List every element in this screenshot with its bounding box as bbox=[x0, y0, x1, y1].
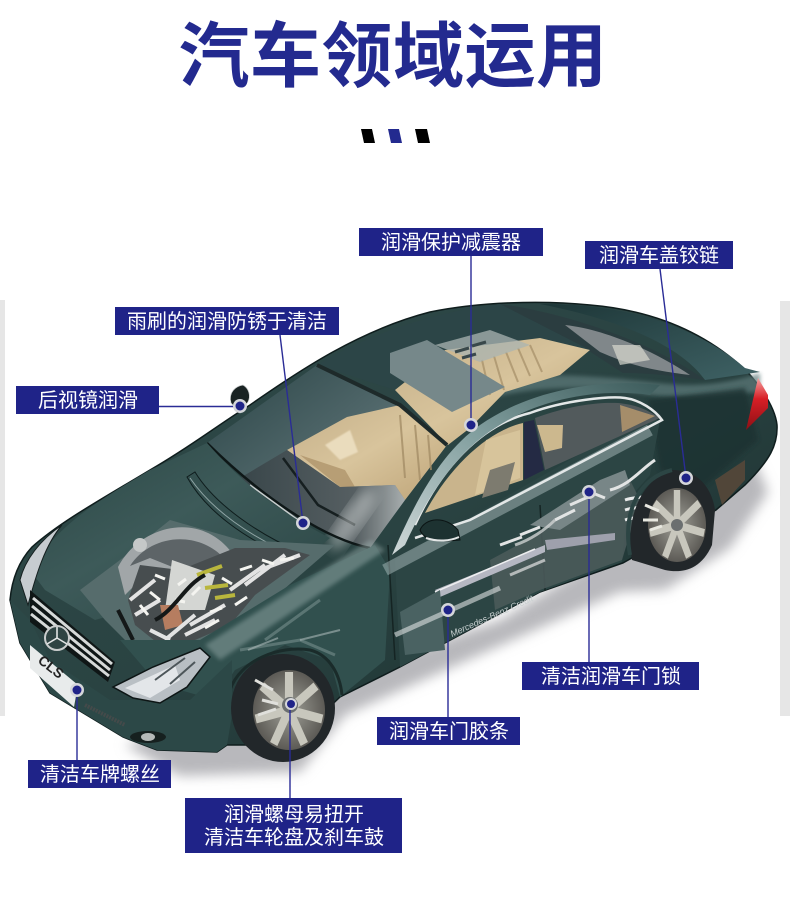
callout: door lock bbox=[522, 485, 699, 690]
callout: door seal bbox=[377, 603, 520, 745]
callout: license plate screws bbox=[28, 683, 171, 788]
door interior mechanics bbox=[395, 460, 657, 655]
rear window bbox=[500, 304, 705, 380]
callout: trunk hinge bbox=[585, 241, 733, 485]
license plate bbox=[30, 645, 78, 707]
callout: wiper: 雨刷的润滑防锈于清洁 bbox=[127, 310, 327, 333]
roof glass panel bbox=[390, 330, 530, 412]
windshield bbox=[207, 365, 447, 556]
callout: rear-view mirror: 后视镜润滑 bbox=[38, 389, 138, 412]
rear quarter panel highlight bbox=[490, 373, 760, 490]
wing mirror on left side bbox=[230, 385, 249, 413]
callout: shock absorber: 润滑保护减震器 bbox=[381, 231, 521, 254]
license plate: CLS bbox=[35, 652, 67, 682]
callout: door lock: 清洁润滑车门锁 bbox=[541, 665, 681, 688]
tail light bbox=[746, 378, 768, 430]
front left headlight bbox=[20, 525, 62, 605]
callout: wheel nuts and brake drum: 清洁车轮盘及刹车鼓 bbox=[204, 826, 384, 849]
callout: rear-view mirror bbox=[16, 386, 247, 414]
front door and sill bbox=[385, 420, 660, 667]
callout: trunk hinge: 润滑车盖铰链 bbox=[599, 244, 719, 267]
front wheel bbox=[231, 654, 335, 762]
front bumper bbox=[10, 600, 232, 752]
callout: license plate screws: 清洁车牌螺丝 bbox=[40, 763, 160, 786]
ground shadow bbox=[125, 462, 768, 776]
car body bbox=[10, 302, 777, 752]
callout: wheel nuts and brake drum bbox=[185, 698, 402, 853]
cowl vent grille bbox=[187, 472, 300, 560]
title decoration marks bbox=[361, 129, 430, 143]
engine bay bbox=[80, 520, 335, 645]
trunk lid bbox=[540, 304, 760, 380]
front fender and light streak bbox=[120, 540, 390, 700]
main headlight bbox=[113, 648, 210, 703]
rear wheel bbox=[628, 470, 715, 571]
callout: wiper bbox=[115, 307, 339, 530]
radiator grille and emblem bbox=[30, 590, 115, 682]
cabin interior seen through the roof bbox=[395, 338, 590, 445]
car illustration bbox=[10, 302, 777, 776]
roof upper glass band bbox=[317, 304, 590, 390]
front lower bumper strip bbox=[85, 705, 125, 725]
page background side strips bbox=[0, 300, 790, 716]
side windows bbox=[415, 398, 662, 538]
A-pillar and waist curve bbox=[392, 383, 660, 555]
title: 汽车领域运用 bbox=[178, 18, 608, 97]
callout: door seal: 润滑车门胶条 bbox=[389, 720, 509, 743]
door interior mechanics: Mercedes-Benz Credit bbox=[449, 593, 535, 639]
hood bbox=[30, 443, 330, 620]
callout: shock absorber bbox=[359, 228, 543, 432]
door mirror bbox=[420, 520, 460, 541]
callout: wheel nuts and brake drum: 润滑螺母易扭开 bbox=[224, 803, 364, 826]
rear bumper detail bbox=[715, 460, 745, 505]
